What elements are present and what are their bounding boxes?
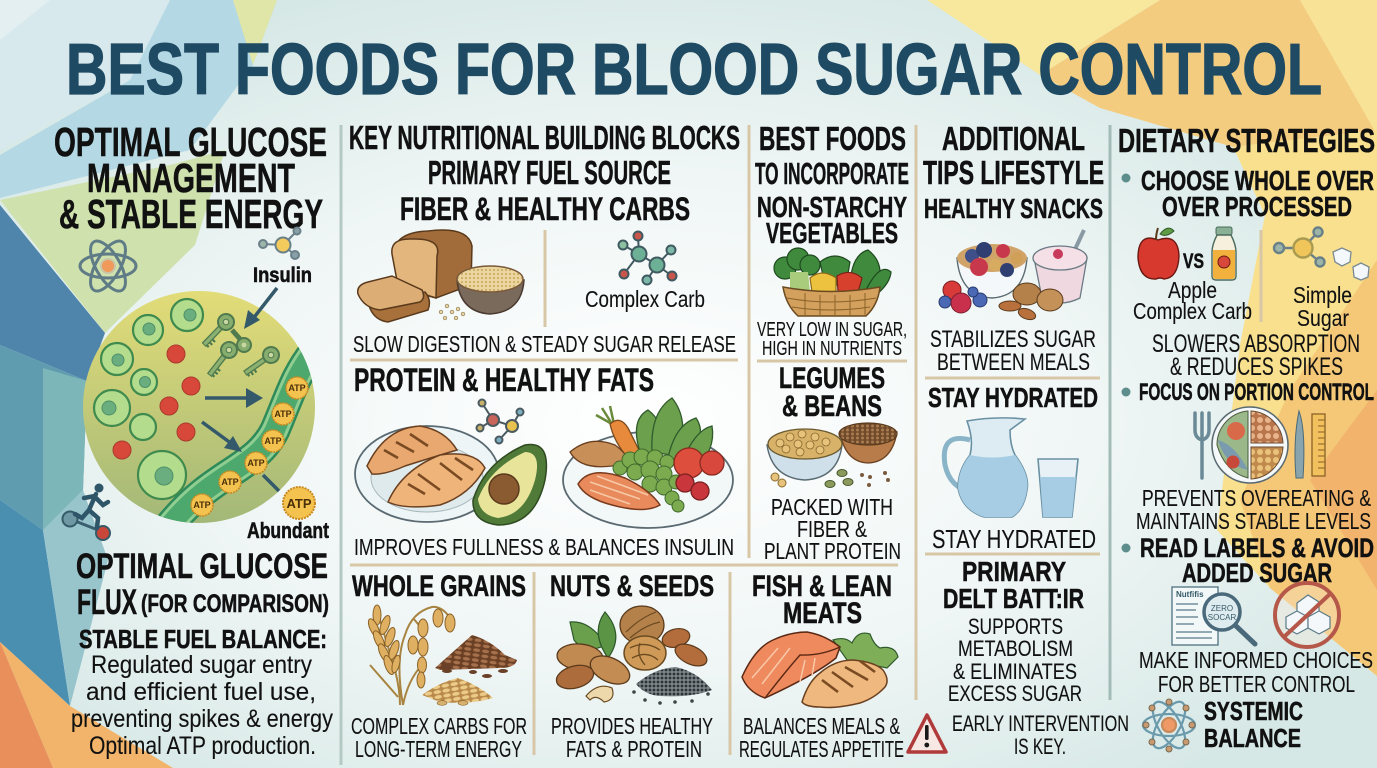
caption [764, 494, 901, 564]
text block: glucose flux: Optimal ATP production. [89, 732, 316, 760]
caption: PACKED WITH [771, 494, 893, 520]
icon: atom [80, 236, 136, 296]
caption: REGULATES APPETITE [739, 736, 904, 762]
icon: salmon and vegetable plate [563, 398, 733, 528]
strategy: choose whole [1122, 165, 1374, 222]
heading: NUTS & SEEDS [550, 570, 714, 603]
heading: optimal glucose management: MANAGEMENT [87, 155, 295, 201]
heading [752, 570, 892, 630]
panel: glucose management [54, 119, 333, 760]
icon: simple sugar molecule and cubes [1274, 228, 1369, 280]
heading: TIPS LIFESTYLE [923, 154, 1104, 191]
icon: snacks [939, 230, 1087, 322]
label: systemic balance: SYSTEMIC [1204, 696, 1303, 726]
ATP badges: ATP [193, 500, 211, 510]
icon: wheat and grain piles [366, 605, 517, 705]
text block: supports metabolism: METABOLISM [958, 636, 1073, 661]
text block: glucose flux: FLUX [77, 583, 137, 622]
text block: glucose flux: and efficient fuel use, [86, 678, 316, 706]
heading: stay hydrated: STAY HYDRATED [928, 382, 1098, 413]
icon: chicken and avocado plate [355, 426, 546, 525]
heading: VEGETABLES [766, 218, 898, 250]
heading: legumes: LEGUMES [779, 362, 885, 395]
caption [1139, 647, 1373, 697]
text block: glucose flux: STABLE FUEL BALANCE: [79, 624, 327, 654]
caption: slow digestion: SLOW DIGESTION & STEADY SUGAR RELEASE [353, 331, 736, 357]
caption: FIBER & [797, 516, 867, 542]
icon: systemic balance atom [1143, 697, 1195, 753]
caption: BALANCES MEALS & [743, 713, 900, 739]
caption: VERY LOW IN SUGAR, [757, 319, 907, 341]
icon: vegetable basket [774, 248, 891, 316]
caption: HIGH IN NUTRIENTS [762, 338, 902, 360]
icon: apple versus juice [1138, 227, 1236, 280]
heading: legumes: & BEANS [782, 390, 882, 423]
label: insulin: Insulin [253, 264, 312, 287]
panel: additional tips [908, 120, 1129, 759]
text block: glucose flux: (FOR COMPARISON) [141, 590, 329, 618]
strategy: read labels [1122, 533, 1374, 588]
label: systemic balance: BALANCE [1204, 723, 1301, 753]
heading: legumes [779, 362, 885, 423]
icon: runner [62, 484, 110, 540]
ATP badges: ATP [288, 383, 306, 393]
heading: HEALTHY SNACKS [924, 193, 1103, 224]
panel: best foods to incorporate [755, 120, 909, 564]
heading [755, 120, 909, 250]
heading: building blocks: FIBER & HEALTHY CARBS [400, 191, 690, 227]
caption: PROVIDES HEALTHY [551, 713, 713, 739]
text block: early intervention [952, 711, 1129, 759]
label: abundant: Abundant [247, 518, 330, 543]
heading: TO INCORPORATE [755, 156, 909, 191]
caption: FATS & PROTEIN [566, 736, 702, 762]
text block: early intervention: EARLY INTERVENTION [952, 711, 1129, 736]
heading: optimal glucose management: OPTIMAL GLUCOSE [54, 119, 327, 165]
icon: plate, fork, knife and ruler [1195, 407, 1325, 483]
label: simple sugar: Sugar [1297, 305, 1349, 331]
caption: PLANT PROTEIN [764, 538, 901, 564]
panel: whole grains [351, 570, 527, 762]
heading: building blocks: KEY NUTRITIONAL BUILDING BLOCKS [349, 119, 740, 156]
arrows [202, 288, 279, 491]
icon: insulin molecule [259, 228, 300, 259]
label: systemic balance [1204, 696, 1303, 753]
icon: nuts and seeds [554, 606, 712, 705]
heading: building blocks [349, 119, 740, 227]
panel: key nutritional building blocks [349, 119, 740, 560]
label: complex carb: Complex Carb [585, 286, 705, 312]
icon: nutrition label and magnifier [1172, 587, 1255, 645]
heading: building blocks: PRIMARY FUEL SOURCE [428, 154, 671, 191]
ATP badges: ATP [247, 458, 265, 468]
heading: MEATS [783, 597, 862, 630]
ATP badges: ATP [286, 496, 312, 511]
caption [551, 713, 713, 762]
heading: optimal glucose management: & STABLE ENERGY [59, 191, 323, 237]
icon: nutrition label and magnifier: Nutfifis [1176, 590, 1204, 599]
text block: early intervention: IS KEY. [1014, 734, 1066, 759]
heading: primary delt: PRIMARY [962, 556, 1066, 587]
label: vs: VS [1183, 250, 1204, 273]
label: simple sugar: Simple [1293, 282, 1352, 308]
cells [94, 299, 203, 499]
label: apple complex carb: Apple [1168, 277, 1217, 303]
icon: salmon and chicken [742, 632, 898, 708]
text block: supports metabolism: & ELIMINATES [953, 659, 1077, 684]
icon: warning triangle [908, 715, 946, 752]
heading: FISH & LEAN [752, 570, 892, 603]
text block: glucose flux [71, 547, 333, 760]
panel: dietary strategies [1118, 122, 1375, 753]
heading: ADDITIONAL [942, 120, 1085, 157]
glucose dots [113, 345, 200, 459]
caption: LONG-TERM ENERGY [355, 736, 522, 762]
blood vessel [170, 350, 315, 525]
heading: primary delt: DELT BATT:IR [943, 583, 1084, 614]
caption [351, 713, 527, 762]
panel: nuts and seeds [550, 570, 714, 762]
keys [198, 311, 282, 380]
caption: STABILIZES SUGAR [930, 326, 1096, 353]
text block: glucose flux: Regulated sugar entry [91, 651, 312, 679]
heading: optimal glucose management [54, 119, 327, 237]
caption [1136, 485, 1371, 534]
caption: fullness: IMPROVES FULLNESS & BALANCES INSULIN [354, 534, 734, 560]
text block: supports metabolism: SUPPORTS [968, 614, 1063, 639]
ATP badges: ATP [221, 477, 239, 487]
diagram: cells and blood vessel [83, 288, 315, 525]
ATP badges: ATP [274, 409, 292, 419]
text block: supports metabolism: EXCESS SUGAR [948, 681, 1082, 706]
icon: protein molecule [476, 400, 524, 444]
caption [1152, 330, 1360, 381]
text block: glucose flux: OPTIMAL GLUCOSE [76, 547, 328, 586]
panel: fish and lean meats [739, 570, 904, 762]
ATP badges: ATP [264, 436, 282, 446]
text block: glucose flux: preventing spikes & energy [71, 705, 333, 733]
ATP badges [191, 377, 315, 519]
icon: nutrition label and magnifier: ZERO [1211, 604, 1233, 613]
icon: legumes bowls [767, 423, 897, 488]
text block: supports metabolism [948, 614, 1082, 706]
column dividers [341, 125, 1261, 765]
icon: nutrition label and magnifier: SOCAR [1208, 613, 1236, 622]
caption [739, 713, 904, 762]
icon: water pitcher and glass [944, 418, 1078, 517]
heading: NON-STARCHY [757, 192, 907, 224]
heading [923, 120, 1104, 224]
icon: complex carb molecule [618, 232, 676, 284]
caption: BETWEEN MEALS [937, 349, 1090, 376]
caption [930, 326, 1096, 376]
heading: BEST FOODS [759, 120, 906, 157]
heading: primary delt [943, 556, 1084, 614]
caption: stay hydrated: STAY HYDRATED [932, 524, 1096, 554]
label: apple complex carb: Complex Carb [1133, 298, 1252, 324]
icon: bread and grain bowl [358, 230, 524, 322]
strategy: read labels: ADDED SUGAR [1182, 558, 1332, 588]
caption [757, 319, 907, 360]
icon: no sugar [1275, 583, 1339, 647]
caption: COMPLEX CARBS FOR [351, 713, 527, 739]
heading: WHOLE GRAINS [352, 570, 526, 603]
label: apple complex carb [1133, 277, 1252, 324]
label: simple sugar [1293, 282, 1352, 331]
heading: protein and healthy fats: PROTEIN & HEALTHY FATS [354, 362, 654, 398]
